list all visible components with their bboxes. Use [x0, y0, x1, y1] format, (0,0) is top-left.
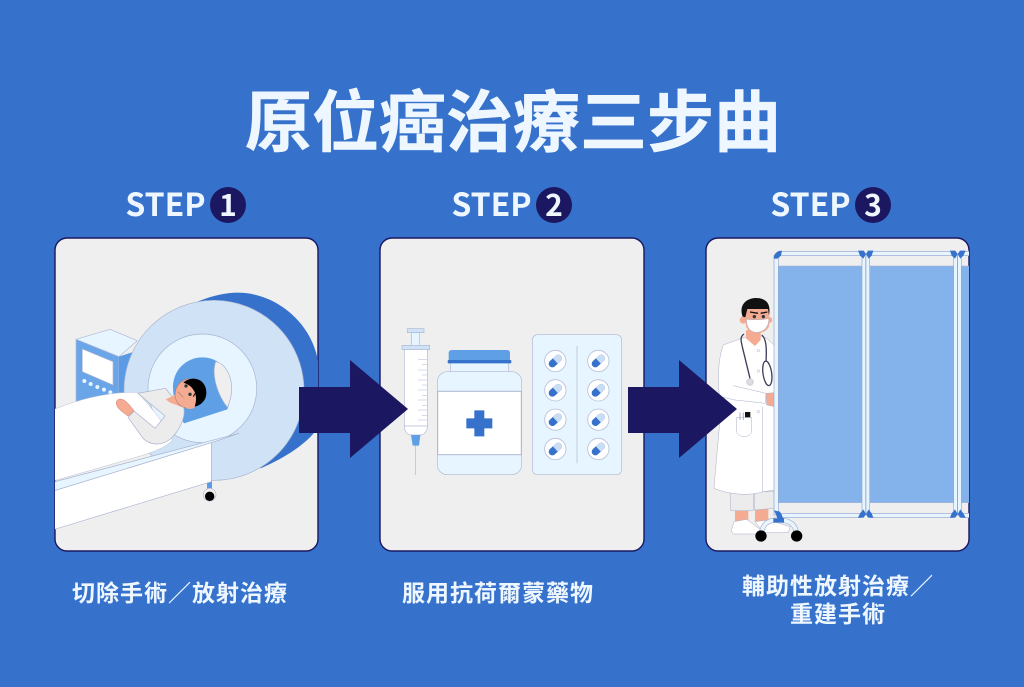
caption: step 2: 服用抗荷爾蒙藥物: [402, 574, 594, 608]
title: 原位癌治療三步曲: [245, 69, 781, 166]
heading: step 1: [125, 180, 246, 226]
caption: step 3: [742, 567, 934, 629]
heading: step 1: 1: [219, 181, 237, 225]
heading: step 2: 2: [545, 181, 563, 225]
patient head and body: [128, 388, 184, 444]
heading: step 3: [770, 180, 891, 226]
heading: step 3: STEP: [770, 180, 851, 226]
caption: step 1: 切除手術／放射治療: [72, 574, 288, 608]
heading: step 1: STEP: [125, 180, 206, 226]
illustration: patient in scanner: [52, 293, 319, 530]
icon: blister pack: [532, 335, 622, 475]
caption: step 3: 輔助性放射治療／: [742, 567, 934, 601]
panel: step 2 medication: [380, 238, 644, 551]
arrow: step 1 to step 2: [299, 360, 408, 458]
panel: step 3 doctor and screen: [706, 238, 977, 551]
arrow: step 2 to step 3: [628, 360, 737, 458]
illustration: doctor: [714, 298, 790, 534]
illustration: folding screen: [755, 251, 977, 542]
panel: step 1 scanner: [52, 238, 319, 551]
icon: syringe: [402, 329, 430, 475]
heading: step 2: STEP: [451, 180, 532, 226]
icon: medicine bottle: [437, 350, 522, 475]
heading: step 2: [451, 180, 572, 226]
screen foot: [762, 520, 797, 535]
caption: step 3: 重建手術: [790, 595, 886, 629]
heading: step 3: 3: [864, 181, 882, 225]
